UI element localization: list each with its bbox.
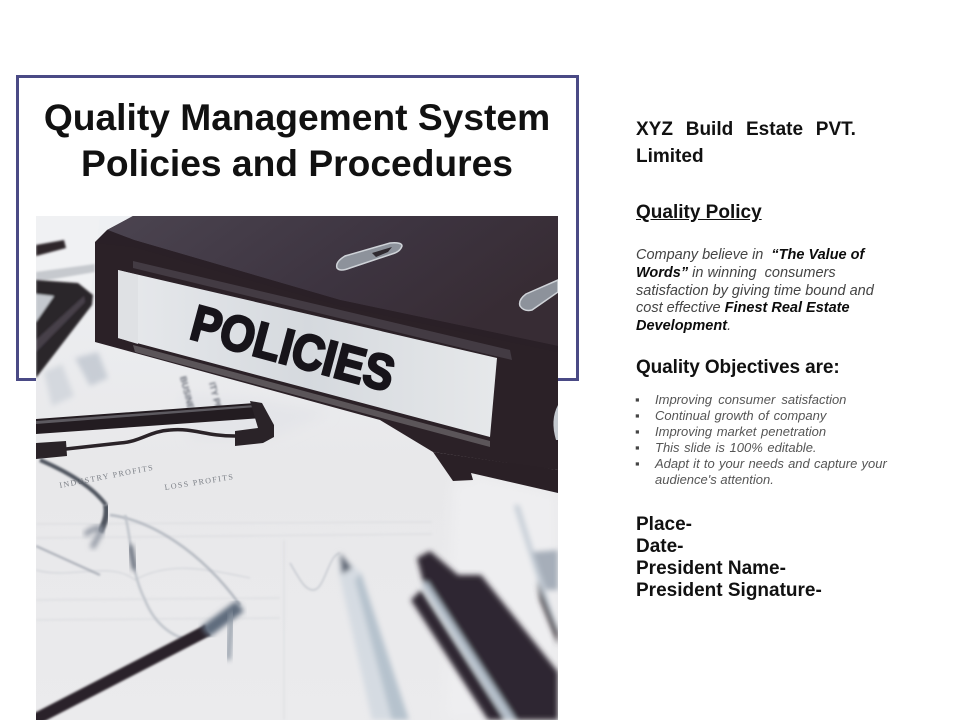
policy text <box>636 247 874 334</box>
heading: quality policy: Quality Policy <box>636 202 762 223</box>
heading: quality objectives: Quality Objectives are: <box>636 357 840 378</box>
report headings: LOSS PROFITS <box>164 472 235 492</box>
right side pen <box>514 505 558 645</box>
rotated report text <box>178 375 224 422</box>
policy text: cost effective Finest Real Estate <box>636 300 850 316</box>
rotated report text: BUSINESS <box>178 375 199 422</box>
report table lines <box>36 522 432 720</box>
binder shadow, bottom right <box>433 452 558 493</box>
objective items: This slide is 100% editable. <box>655 440 817 455</box>
company name <box>636 119 856 167</box>
photo: policies binder on desk <box>36 216 558 720</box>
title: Policies and Procedures <box>81 142 513 184</box>
pencil <box>339 553 409 720</box>
desk and papers <box>36 216 558 720</box>
rotated report text: ITY PR <box>207 381 224 412</box>
sign-off fields: Place- <box>636 514 692 535</box>
policy text: Words” in winning consumers <box>636 265 836 281</box>
objective items: Continual growth of company <box>655 408 826 423</box>
policy text: satisfaction by giving time bound and <box>636 282 874 298</box>
objective items: Improving market penetration <box>655 424 826 439</box>
policy text: Company believe in “The Value of <box>636 247 864 263</box>
sign-off fields: President Name- <box>636 558 786 579</box>
title: Quality Management System <box>44 96 550 138</box>
clipboard clip <box>36 401 274 459</box>
dark tablet, left <box>36 280 93 378</box>
report headings: INDUSTRY PROFITS <box>59 463 155 490</box>
bullet markers: ▪ <box>635 456 640 471</box>
title frame <box>16 75 579 381</box>
spine label: POLICIES <box>185 295 401 402</box>
title <box>44 96 550 184</box>
black pen <box>411 551 558 720</box>
objective items: audience's attention. <box>655 472 774 487</box>
company name: XYZ Build Estate PVT. <box>636 119 856 140</box>
bullet markers <box>635 392 640 471</box>
bullet markers: ▪ <box>635 392 640 407</box>
objectives list <box>635 392 888 487</box>
sign-off fields: Date- <box>636 536 684 557</box>
glasses <box>30 460 240 720</box>
bullet markers: ▪ <box>635 408 640 423</box>
binder <box>95 216 558 470</box>
objective items: Adapt it to your needs and capture your <box>655 456 887 471</box>
objective items: Improving consumer satisfaction <box>655 392 846 407</box>
report small chart <box>290 553 340 590</box>
bullet markers: ▪ <box>635 440 640 455</box>
company name: Limited <box>636 146 704 167</box>
report headings <box>59 463 235 492</box>
sign-off fields <box>636 514 822 601</box>
policy text: Development. <box>636 318 731 334</box>
spine label <box>118 270 497 437</box>
sign-off fields: President Signature- <box>636 580 822 601</box>
binder rings slots <box>337 243 558 310</box>
bullet markers: ▪ <box>635 424 640 439</box>
small dark pen, top left <box>36 240 95 282</box>
objective items <box>654 392 888 487</box>
